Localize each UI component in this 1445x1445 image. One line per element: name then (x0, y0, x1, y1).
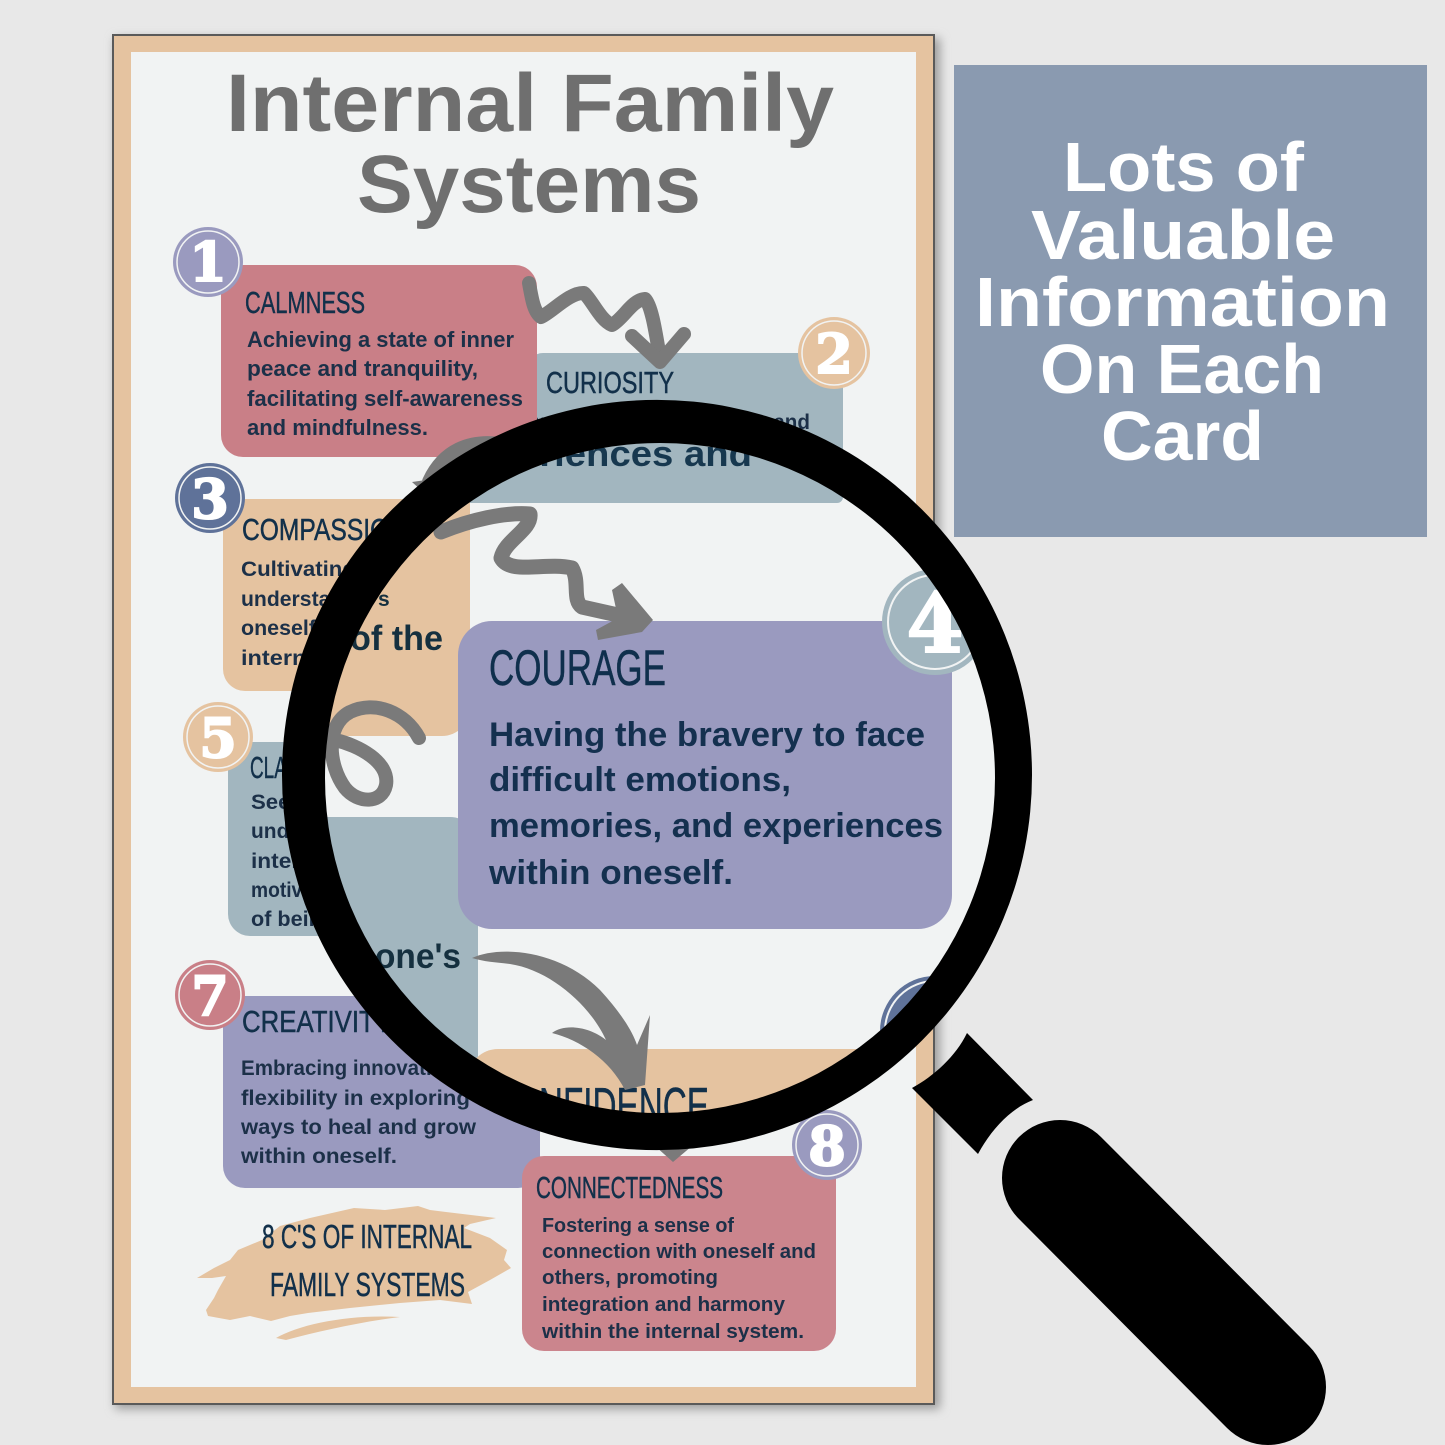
magnifier grip (1060, 1178, 1268, 1387)
panel: curiosity card (520, 353, 843, 503)
magnifier neck (912, 1033, 1033, 1154)
brush stroke with caption: 8 C'S OF INTERNAL (262, 1218, 472, 1255)
icon: number badge 3: 3 (191, 467, 229, 531)
panel: curiosity card: Exploring one's thoughts and (520, 411, 810, 434)
arrow: courage to clarity swirl (332, 707, 419, 800)
panel: creativity card: Embracing innovation and (241, 1057, 499, 1080)
zoomed clarity card (327, 817, 478, 1058)
title: Systems (357, 139, 701, 230)
panel: info box: On Each (1040, 330, 1324, 408)
panel: compassion card: understanding (241, 588, 388, 611)
panel: connectedness card: within the internal system. (541, 1321, 804, 1343)
arrow: compassion to courage (441, 514, 653, 640)
panel: connectedness card: connection with oneself and (542, 1241, 816, 1263)
brush stroke with caption (197, 1206, 511, 1340)
panel: calmness card: and mindfulness. (247, 415, 428, 440)
zoomed compassion card: s (378, 588, 390, 611)
icon: number badge 8: 8 (808, 1114, 846, 1178)
arrow: curiosity to compassion (412, 445, 500, 500)
panel: clarity card: understanding one's (251, 820, 456, 843)
poster card (112, 34, 940, 1409)
panel: calmness card: Achieving a state of inner (247, 327, 514, 352)
panel: info box (954, 65, 1427, 537)
title: Internal Family (226, 58, 834, 149)
zoomed badge 6 (880, 976, 930, 1030)
panel: connectedness card: others, promoting (542, 1267, 718, 1289)
panel: creativity card (223, 996, 540, 1188)
panel: clarity card: motivations, and ways (251, 879, 456, 902)
zoomed curiosity card (470, 443, 843, 503)
panel: clarity card: Seeing clearly and (251, 791, 446, 814)
icon: number badge 3 (175, 463, 245, 533)
panel: info box: Card (1101, 397, 1264, 475)
panel: creativity card: CREATIVITY (242, 1004, 392, 1039)
zoomed curiosity card: experiences and (452, 433, 752, 474)
panel: info box: Valuable (1031, 196, 1335, 274)
panel: info box: Lots of (1063, 128, 1305, 206)
icon: number badge 2 (798, 317, 870, 389)
panel: clarity card: of being. (251, 908, 341, 931)
icon: number badge 7 (175, 960, 245, 1030)
icon: number badge 8 (792, 1110, 862, 1180)
panel: connectedness card: Fostering a sense of (542, 1215, 734, 1237)
panel: compassion card: internal (241, 647, 326, 670)
zoomed clarity card: one's (375, 937, 461, 976)
brush stroke with caption: FAMILY SYSTEMS (270, 1266, 465, 1303)
zoomed confidence card: CONFIDENCE (489, 1078, 709, 1136)
arrow: calmness to curiosity (529, 283, 684, 362)
panel: creativity card: flexibility in exploring (241, 1087, 470, 1110)
panel: clarity card: internal parts, (251, 850, 401, 873)
zoomed compassion card: of the (350, 619, 443, 658)
zoomed badge 4: 4 (906, 576, 964, 672)
icon: number badge 5 (183, 702, 253, 772)
title (226, 58, 834, 230)
zoomed badge 4 (882, 570, 973, 675)
zoomed courage card: difficult emotions, (489, 761, 791, 799)
panel: calmness card: peace and tranquility, (247, 356, 478, 381)
icon: number badge 1 (173, 227, 243, 297)
arrow: clarity to confidence (472, 952, 650, 1090)
panel: curiosity card: CURIOSITY (546, 365, 674, 400)
icon: number badge 1: 1 (189, 230, 227, 294)
zoomed courage card: memories, and experiences (489, 807, 943, 845)
panel: calmness card (221, 265, 537, 457)
zoomed courage card (458, 621, 952, 929)
zoomed courage card: COURAGE (489, 640, 666, 696)
panel: compassion card: COMPASSION (242, 512, 407, 547)
panel: calmness card: facilitating self-awareness (247, 386, 523, 411)
magnified lens content (325, 446, 995, 1113)
icon: number badge 5: 5 (199, 706, 237, 770)
arrow: confidence to connectedness tip (655, 1146, 692, 1162)
panel: connectedness card: CONNECTEDNESS (536, 1170, 723, 1205)
panel: creativity card: within oneself. (240, 1145, 397, 1168)
icon: number badge 7: 7 (191, 964, 229, 1028)
panel: calmness card: CALMNESS (245, 285, 365, 320)
zoomed compassion card (329, 502, 470, 736)
panel: clarity card (228, 742, 468, 936)
icon: number badge 2: 2 (815, 322, 853, 386)
zoomed courage card: Having the bravery to face (489, 716, 925, 754)
panel: clarity card: CLARITY (250, 750, 330, 785)
panel: creativity card: ways to heal and grow (240, 1116, 477, 1139)
magnifying glass (282, 400, 1268, 1387)
zoomed confidence card (476, 1049, 857, 1113)
magnifier ring (282, 400, 1032, 1150)
panel: info box: Information (975, 263, 1390, 341)
zoomed courage card: within oneself. (488, 854, 733, 892)
panel: compassion card (223, 499, 470, 691)
panel: compassion card: oneself (241, 617, 317, 640)
panel: connectedness card: integration and harmony (542, 1294, 786, 1316)
panel: compassion card: Cultivating (241, 558, 356, 581)
panel: connectedness card (522, 1156, 836, 1351)
